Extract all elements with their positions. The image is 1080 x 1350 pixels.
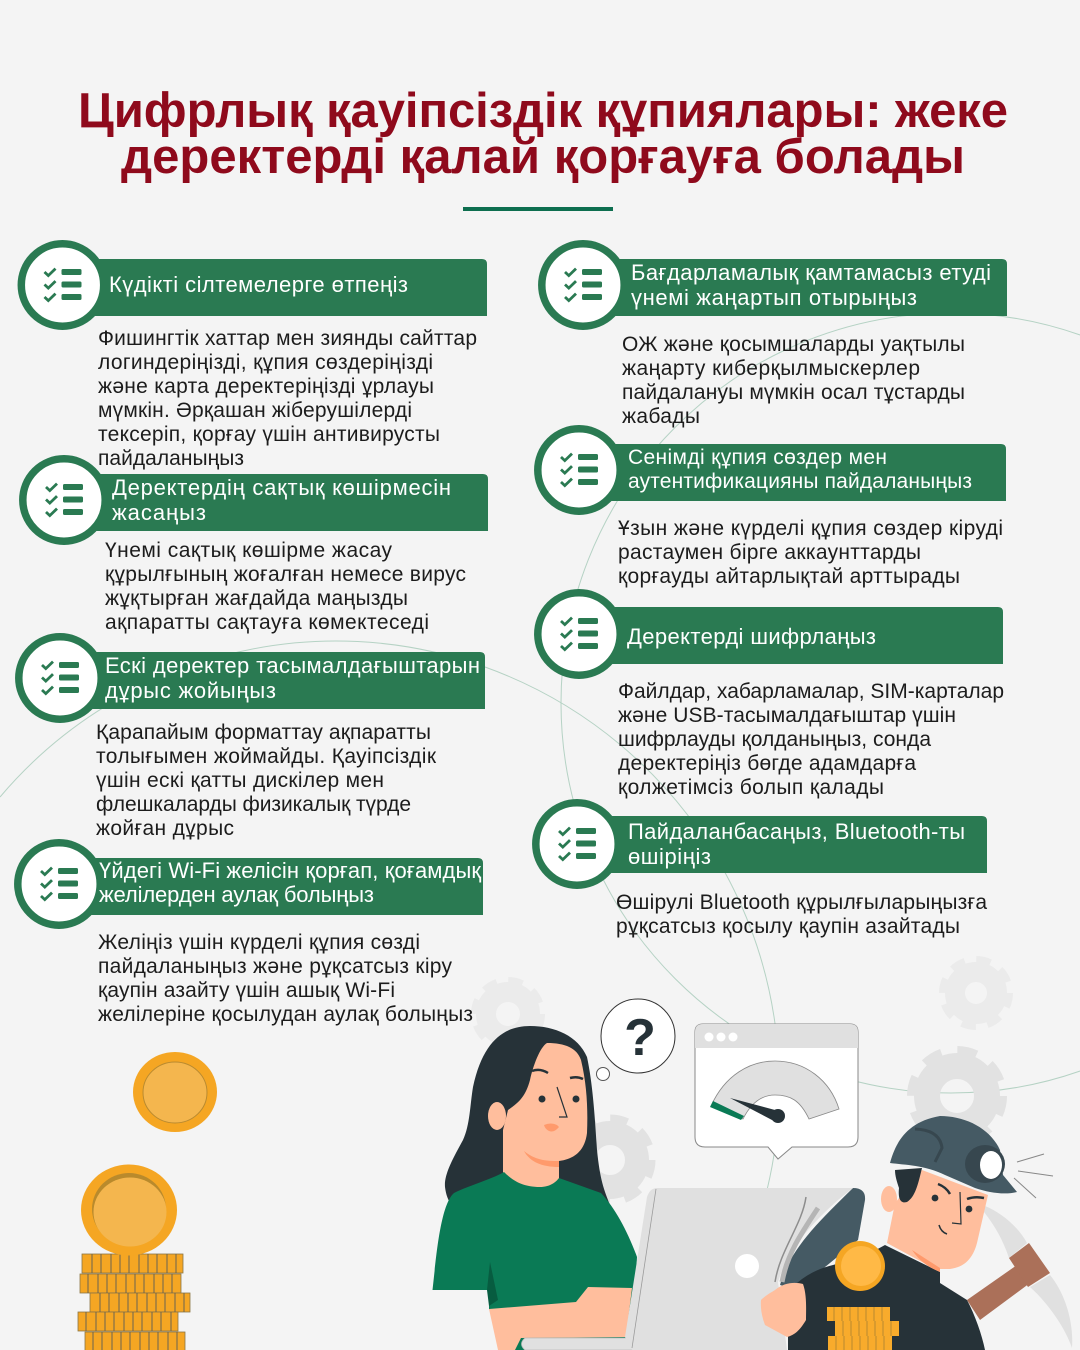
ear [488,1102,506,1130]
body text: Фишингтік хаттар мен зиянды сайттар [98,327,477,350]
panel: backups [23,459,488,634]
laptop base [522,1338,640,1350]
helmet ridge [915,1129,942,1162]
coin [835,1241,885,1291]
title underline [463,207,613,211]
body text [616,891,987,938]
face [887,1170,988,1269]
panel heading: Күдікті сілтемелерге өтпеңіз [109,272,408,297]
panel: old media [19,637,485,840]
hair [445,1026,610,1206]
body text [96,721,437,840]
laptop back panel [780,1188,865,1290]
panel: bluetooth [536,803,987,938]
helmet [890,1116,1017,1193]
panel heading [628,446,972,493]
panel heading: желілерден аулақ болыңыз [99,882,374,907]
icon: checklist [19,637,101,719]
body text: ақпаратты сақтауға көмектеседі [105,611,429,634]
body text: желілеріне қосылудан аулақ болыңыз [98,1003,473,1026]
illustration: miner [761,1116,1072,1350]
icon: floating coin [133,1052,217,1132]
panel: suspicious links [21,244,487,470]
icon: checklist [23,459,105,541]
panel: encryption [538,593,1004,799]
body text: құрылғының жоғалған немесе вирус [105,563,466,586]
banner [579,444,1006,501]
panel heading: өшіріңіз [628,844,711,869]
title: Цифрлық қауіпсіздік құпиялары: жеке [78,84,1008,138]
title [78,84,1008,184]
shirt [432,1172,637,1350]
neck and face [503,1043,587,1200]
panel heading: Ескі деректер тасымалдағыштарын [105,653,480,678]
body text: үшін ескі қатты дискілер мен [96,769,384,792]
icon: checklist [21,244,104,326]
hand [761,1283,806,1337]
title: деректерді қалай қорғауға болады [121,130,965,184]
pickaxe [984,1206,1072,1348]
body text: Өшірулі Bluetooth құрылғыларыңызға [616,891,987,914]
lamp rays [1014,1154,1053,1198]
body text: пайдаланыңыз [98,447,244,470]
face details [932,1195,972,1212]
body text: пайдаланыңыз және рұқсатсыз кіру [98,955,452,978]
body text: Желіңіз үшін күрделі құпия сөзді [98,931,420,954]
body text: шифрлауды қолданыңыз, сонда [618,728,931,751]
body text [105,539,466,634]
torso [788,1245,985,1350]
panel heading [628,819,965,869]
banner [64,474,488,531]
banner [62,259,487,316]
body text [98,931,473,1026]
panel: strong passwords [538,429,1006,588]
panel heading: Деректердің сақтық көшірмесін [112,475,451,500]
panel: wi-fi [18,843,483,1026]
eyes [538,1096,580,1102]
icon: checklist [18,843,100,925]
hair [895,1168,922,1202]
sleeve fold [487,1262,498,1306]
body text: жұқтырған жағдайда маңызды [105,587,408,610]
panel heading: үнемі жаңартып отырыңыз [631,285,917,310]
body text: логиндеріңізді, құпия сөздеріңізді [98,351,433,374]
banner [59,858,483,915]
panel heading [99,858,481,907]
banner [583,259,1007,316]
eyebrows and nose [532,1070,583,1117]
body text: Ұзын және күрделі құпия сөздер кіруді [618,517,1003,540]
body text: толығымен жоймайды. Қауіпсіздік [96,745,437,768]
body text [618,517,1003,588]
body text [98,327,477,470]
panel heading: Деректерді шифрлаңыз [627,624,876,649]
panel heading: дұрыс жойыңыз [105,678,276,703]
background gears [476,961,1008,1200]
panel heading: аутентификацияны пайдаланыңыз [628,470,972,493]
panel heading: Бағдарламалық қамтамасыз етуді [631,260,991,285]
panel heading: Сенімді құпия сөздер мен [628,446,887,469]
body text: растаумен бірге аккаунттарды [618,541,921,564]
icon: coin stack [78,1164,190,1350]
panel heading: Пайдаланбасаңыз, Bluetooth-ты [628,819,965,844]
icon: checklist [536,803,618,885]
body text: мүмкін. Әрқашан жіберушілерді [98,399,412,422]
thought bubble: ? [624,1009,656,1067]
mouth [544,1124,559,1132]
body text: қолжетімсіз болып қалады [618,776,884,799]
background network lines [0,313,1080,1190]
banner [579,607,1003,664]
body text: Үнемі сақтық көшірме жасау [105,539,392,562]
body text: жойған дұрыс [96,817,234,840]
icon: checklist [538,593,620,675]
neck shadow [912,1250,940,1272]
icon: checklist [538,429,620,511]
ear [881,1186,897,1212]
body text: қорғауды айтарлықтай арттырады [618,565,960,588]
small coin stack [827,1307,899,1350]
panel heading: жасаңыз [112,500,206,525]
panel heading [105,653,480,703]
body text: жабады [622,405,700,428]
body text: тексеріп, қорғау үшін антивирусты [98,423,440,446]
body text: жаңарту киберқылмыскерлер [622,357,920,380]
body text: пайдалануы мүмкін осал тұстарды [622,381,965,404]
body text [618,680,1004,799]
body text [622,333,965,428]
illustration: woman [432,1026,637,1350]
banner [577,816,987,873]
panel heading: Үйдегі Wi-Fi желісін қорғап, қоғамдық [99,858,481,883]
body text: ОЖ және қосымшаларды уақтылы [622,333,965,356]
panel heading [112,475,451,525]
body text: рұқсатсыз қосылу қаупін азайтады [616,915,960,938]
body text: Қарапайым форматтау ақпаратты [96,721,431,744]
banner [60,652,485,709]
icon: checklist [542,244,624,326]
arm and hand [489,1287,632,1350]
speedometer window [695,1024,858,1159]
body text: және карта деректеріңізді ұрлауы [98,375,434,398]
body text: Файлдар, хабарламалар, SIM-карталар [618,680,1004,703]
lamp [965,1145,1005,1183]
panel heading [631,260,991,310]
body text: қаупін азайту үшін ашық Wi-Fi [98,979,395,1002]
body text: және USB-тасымалдағыштар үшін [618,704,956,727]
laptop [522,1188,865,1350]
laptop lid [625,1188,853,1350]
body text: деректеріңіз бөгде адамдарға [618,752,916,775]
thought bubble [596,999,675,1080]
panel: software updates [542,244,1007,428]
body text: флешкаларды физикалық түрде [96,793,411,816]
